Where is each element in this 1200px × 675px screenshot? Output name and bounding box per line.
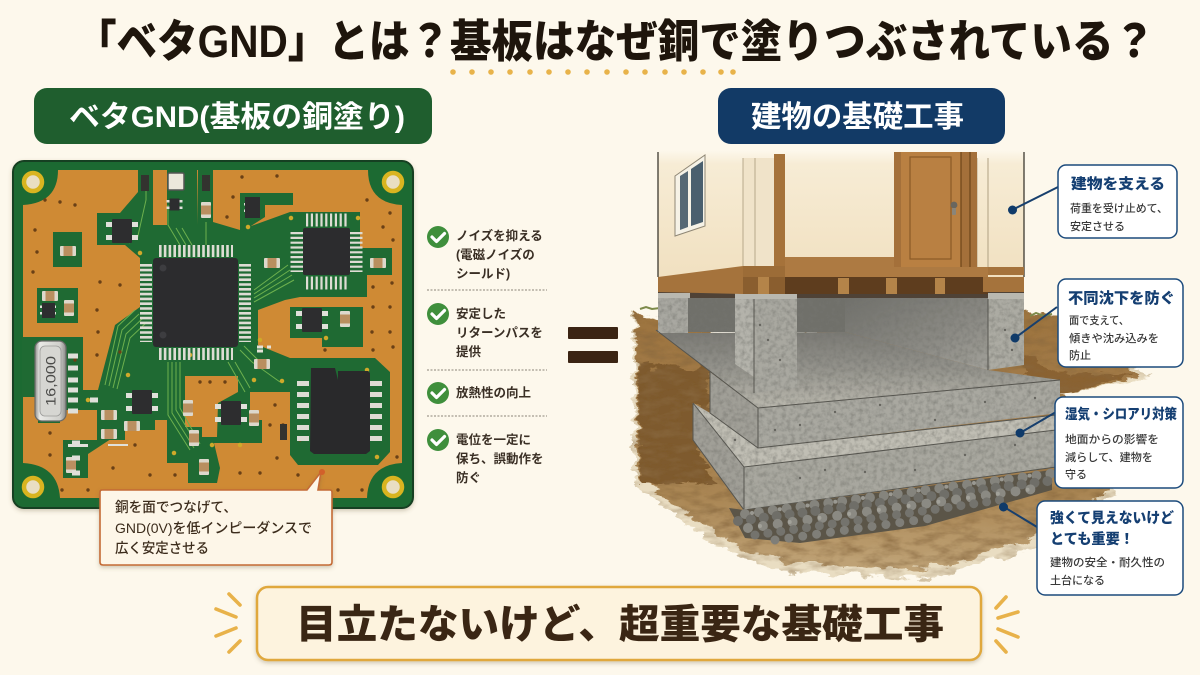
title <box>76 16 1155 67</box>
callout: 不同沈下を防ぐ <box>1010 279 1183 367</box>
equals sign <box>568 327 618 363</box>
banner accent rays <box>216 594 1018 652</box>
check item: potential: 電位を一定に <box>456 432 531 447</box>
callout: 不同沈下を防ぐ: 傾きや沈み込みを <box>1069 331 1159 345</box>
right QFP IC <box>297 220 356 283</box>
gravel bed <box>729 470 1056 543</box>
grass hints <box>640 307 1052 316</box>
building foundation illustration <box>634 150 1150 578</box>
green zone gold vias <box>88 218 377 457</box>
callout: copper GND: 銅を面でつなげて、 <box>115 499 237 515</box>
check item: potential: 保ち、誤動作を <box>456 451 544 466</box>
check item: return path: リターンパスを <box>456 326 543 340</box>
heading: 建物の基礎工事: 建物の基礎工事 <box>751 101 964 134</box>
small ICs <box>40 197 328 425</box>
copper islands <box>185 376 238 437</box>
check item: heat: 放熱性の向上 <box>456 385 531 400</box>
callout: 湿気・シロアリ対策: 湿気・シロアリ対策 <box>1065 406 1177 422</box>
callout: copper GND: GND(0V)を低インピーダンスで <box>115 520 312 536</box>
heading: ベタGND: ベタGND(基板の銅塗り) <box>69 101 405 134</box>
callout: 湿気・シロアリ対策 <box>1016 397 1183 488</box>
callout: 強くて見えないけど: 強くて見えないけど <box>1050 509 1174 527</box>
soil ground <box>634 312 1150 578</box>
bottom banner <box>257 587 981 660</box>
checklist: benefits <box>427 226 547 485</box>
bottom banner: 目立たないけど、超重要な基礎工事 <box>296 603 944 647</box>
PCB illustration <box>13 161 413 508</box>
callout: 建物を支える: 建物を支える <box>1071 175 1165 193</box>
check item: noise: シールド) <box>456 267 510 281</box>
check item: noise: (電磁ノイズの <box>456 247 535 262</box>
callout: 建物を支える <box>1008 165 1177 238</box>
concrete slabs and walls <box>656 297 1060 510</box>
callout: 建物を支える: 安定させる <box>1070 219 1125 233</box>
under-floor shadow <box>658 290 1024 300</box>
green routing areas <box>23 170 392 483</box>
copper pour <box>23 170 402 498</box>
callout: 湿気・シロアリ対策: 守る <box>1065 468 1087 481</box>
callout: 強くて見えないけど: 建物の安全・耐久性の <box>1050 555 1165 569</box>
callout: 建物を支える: 荷重を受け止めて、 <box>1070 201 1168 215</box>
check item: noise: ノイズを抑える <box>456 228 543 243</box>
check item: potential <box>427 429 544 485</box>
check item: potential: 防ぐ <box>456 470 481 485</box>
copper vias <box>33 176 397 490</box>
title: 「ベタGND」とは？ <box>76 16 450 67</box>
callout: 不同沈下を防ぐ: 防止 <box>1069 348 1091 362</box>
lower-right SOIC IC <box>303 368 376 454</box>
window <box>675 155 705 236</box>
callout: copper GND <box>100 469 332 565</box>
callout: 強くて見えないけど <box>999 501 1183 595</box>
callout: copper GND: 広く安定させる <box>115 540 209 556</box>
title: 基板はなぜ銅で塗りつぶされている？ <box>450 16 1155 67</box>
pier caps <box>658 293 1024 299</box>
concrete speckles <box>735 325 1035 478</box>
timber posts, sill and joists <box>658 154 1024 294</box>
title dotted underline <box>450 69 736 75</box>
check item: noise <box>427 226 543 281</box>
callout: 不同沈下を防ぐ: 不同沈下を防ぐ <box>1068 289 1175 307</box>
board base <box>13 161 413 508</box>
crystal 16,000 <box>35 341 66 421</box>
callout: 強くて見えないけど: 土台になる <box>1050 573 1105 587</box>
capacitors and passives <box>42 173 386 475</box>
check item: return path: 安定した <box>456 306 506 321</box>
main MCU <box>146 251 245 354</box>
check item: heat <box>427 382 531 404</box>
callout: 強くて見えないけど: とても重要！ <box>1050 530 1134 548</box>
check item: return path <box>427 303 543 359</box>
house walls <box>658 150 1024 290</box>
mounting holes <box>24 173 402 496</box>
heading: ベタGND <box>34 88 432 144</box>
crystal 16,000: 16,000 <box>42 356 58 406</box>
heading: 建物の基礎工事 <box>718 88 1005 144</box>
callout: 湿気・シロアリ対策: 減らして、建物を <box>1065 450 1153 464</box>
signal traces <box>105 175 294 450</box>
door <box>894 152 977 267</box>
callout: 湿気・シロアリ対策: 地面からの影響を <box>1065 432 1159 446</box>
check item: return path: 提供 <box>456 344 482 359</box>
callout: 不同沈下を防ぐ: 面で支えて、 <box>1069 314 1129 327</box>
